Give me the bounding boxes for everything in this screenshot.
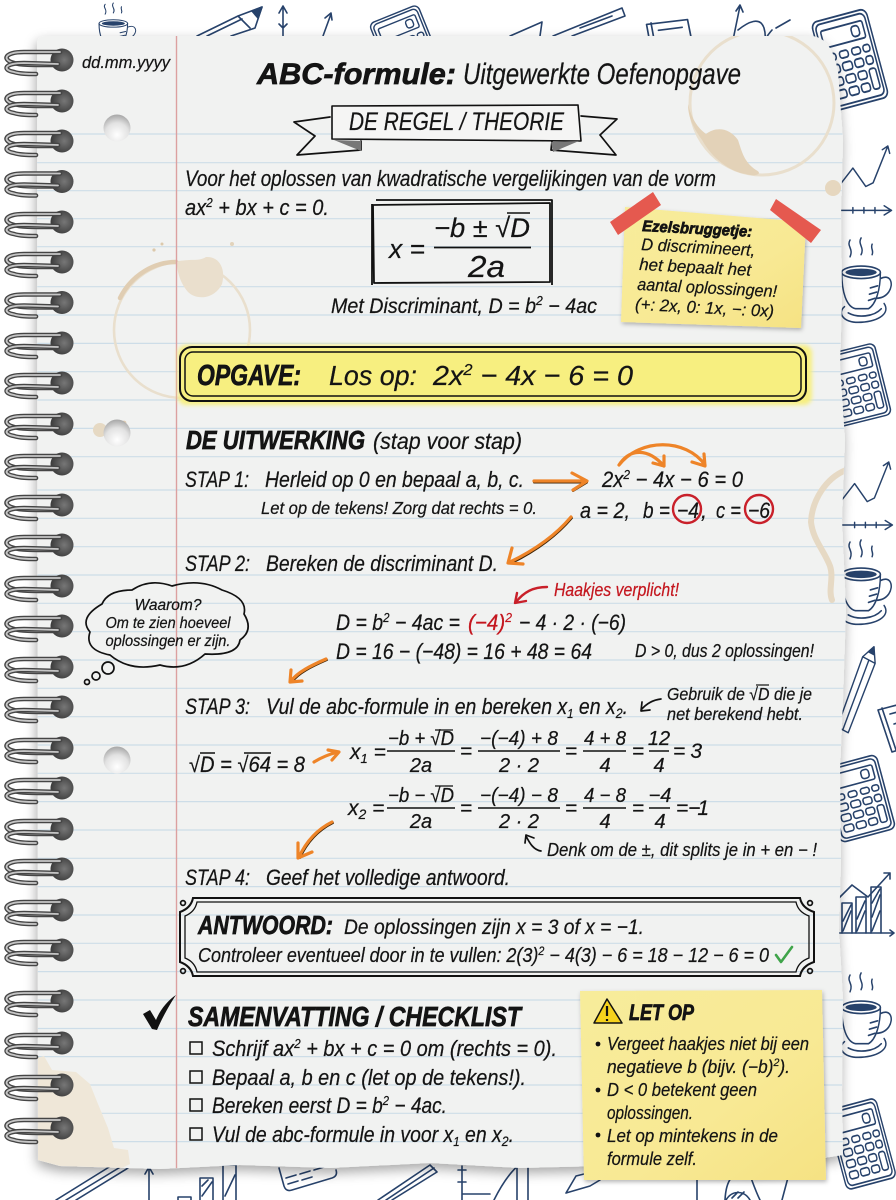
discriminant calculation: 2	[382, 610, 390, 625]
icon: arrow	[323, 13, 332, 36]
discriminant calculation: (−4)	[468, 610, 508, 635]
coefficients	[580, 495, 773, 523]
margin line	[176, 36, 178, 1170]
stap 1: Let op de tekens! Zorg dat rechts = 0.	[261, 498, 537, 518]
checklist: 2	[293, 1036, 301, 1051]
x2 formula: −(−4) − 8	[480, 785, 558, 807]
x1 formula: =	[565, 740, 577, 763]
icon: cup bottom	[697, 1170, 790, 1200]
x1 formula: 4	[653, 755, 665, 777]
x2 formula: =	[460, 797, 472, 820]
sticky note: let op: ).	[777, 1057, 790, 1077]
intro text: 2	[205, 195, 213, 210]
stap 4	[185, 865, 510, 890]
answer box: Controleer eventueel door in te vullen: 2(3)	[198, 945, 577, 967]
checklist: 2	[501, 1133, 509, 1149]
arrow: stap 1 to equation	[534, 473, 587, 491]
annotation: gebruik wortel D: net berekend hebt.	[667, 704, 803, 724]
sticky note: let op: Vergeet haakjes niet bij een	[607, 1034, 809, 1054]
checklist: en x	[460, 1122, 503, 1147]
discriminant calculation: D = 16 − (−48) = 16 + 48 = 64	[336, 639, 592, 664]
x1 formula: 12	[648, 728, 670, 750]
discriminant calculation: − 4 · 2 · (−6)	[519, 610, 626, 635]
sticky text	[635, 218, 781, 321]
checklist: Vul de abc-formule in voor x	[212, 1122, 486, 1147]
stap 3: .	[623, 694, 628, 719]
sticky note: let op	[580, 990, 826, 1180]
equation with sign arrows: 2x	[602, 467, 625, 492]
intro text: Voor het oplossen van kwadratische vergelijkingen van de vorm	[185, 166, 716, 191]
annotation: plus minus: Denk om de ±, dit splits je in + en − !	[547, 840, 817, 860]
banner: de regel / theorie	[294, 105, 617, 155]
sticky note: let op: negatieve b (bijv. (−b)	[607, 1057, 779, 1077]
equation with sign arrows: 2	[622, 467, 631, 482]
sticky text: (+: 2x, 0: 1x, −: 0x)	[635, 295, 775, 321]
stap 1: Herleid op 0 en bepaal a, b, c.	[265, 467, 524, 492]
root of D: √D = √64 = 8	[189, 752, 306, 777]
checkboxes	[190, 1042, 202, 1140]
icon: calculator bottom right	[826, 1098, 896, 1190]
discriminant calculation: D > 0, dus 2 oplossingen!	[635, 641, 814, 661]
intro text: + bx + c = 0.	[213, 195, 329, 220]
discriminant calculation: − 4ac =	[390, 610, 460, 635]
stap 2: Bereken de discriminant D.	[266, 551, 498, 576]
red annotation	[515, 579, 679, 603]
stap 3: STAP 3:	[185, 694, 250, 719]
x1 formula: 4	[599, 755, 611, 777]
coffee stain: left	[93, 242, 250, 437]
checklist: + bx + c = 0 om (rechts = 0).	[301, 1036, 557, 1061]
heading: de uitwerking: DE UITWERKING	[186, 425, 365, 455]
thought bubble: Om te zien hoeveel	[106, 615, 231, 632]
checklist: Schrijf ax	[212, 1036, 302, 1061]
icon: line chart right 2	[842, 462, 892, 530]
formula box: 2a	[467, 249, 505, 284]
sticky note: let op: Let op mintekens in de	[607, 1126, 778, 1146]
sticky note: let op: 2	[772, 1057, 779, 1069]
x2 formula: 4	[654, 811, 666, 833]
arrow: to stap 4	[298, 822, 333, 858]
checklist	[188, 1001, 557, 1149]
equation with sign arrows: − 4x − 6 = 0	[630, 467, 744, 492]
x2 formula: =	[565, 797, 577, 820]
icon: pencil bottom	[378, 1165, 437, 1200]
x1 formula: −(−4) + 8	[480, 728, 558, 750]
sticky text: Ezelsbruggetje:	[642, 218, 753, 241]
annotation: gebruik wortel D	[641, 684, 812, 724]
coefficients: ,	[701, 498, 707, 523]
opgave box: − 4x − 6 = 0	[472, 360, 633, 391]
x2 formula	[347, 785, 709, 833]
stap 1: STAP 1:	[185, 467, 249, 492]
thought bubble: oplossingen er zijn.	[106, 633, 230, 650]
icon: line chart right 1	[840, 146, 892, 215]
sticky note: let op: formule zelf.	[607, 1149, 697, 1169]
icon: pencil bottom left	[56, 1164, 128, 1200]
stap 2: STAP 2:	[185, 551, 250, 576]
checklist: − 4ac.	[389, 1093, 447, 1118]
x2 formula: x	[348, 797, 358, 820]
checklist: SAMENVATTING / CHECKLIST	[188, 1001, 523, 1032]
icon: calculator top middle	[369, 4, 444, 89]
title	[256, 58, 741, 91]
x2 formula: 2a	[409, 811, 432, 833]
icon: notepad	[640, 14, 702, 76]
opgave box: Los op:	[329, 360, 417, 391]
x2 formula: = −1	[676, 797, 709, 820]
red annotation: Haakjes verplicht!	[554, 579, 679, 600]
x2 formula: =	[366, 797, 384, 820]
thought bubble: Waarom?	[135, 597, 202, 614]
sticky note: ezelsbruggetje	[610, 192, 821, 328]
x1 formula: 2 · 2	[498, 755, 539, 777]
icon: notebook right	[878, 700, 896, 752]
discriminant calculation: 2	[504, 610, 513, 625]
x2 formula: =	[632, 797, 644, 820]
icon: coffee cup right 1	[841, 238, 891, 322]
x1 formula: x	[350, 741, 360, 764]
icon: bar chart right	[838, 873, 894, 936]
stap 4: STAP 4:	[185, 865, 250, 890]
ruled lines	[37, 134, 846, 1142]
x2 formula: −4	[649, 785, 671, 807]
coefficients: −4	[677, 498, 699, 523]
x1 formula	[349, 728, 702, 777]
formula box: x =	[387, 234, 425, 264]
x2 formula: 2	[358, 806, 366, 822]
icon: calculator right 1	[821, 343, 892, 427]
sticky text: aantal oplossingen!	[637, 275, 778, 301]
x1 formula: 4 + 8	[584, 728, 626, 750]
icon: arrow bottom	[145, 1167, 153, 1200]
coefficients: −6	[748, 498, 771, 523]
icon: calculator bottom	[279, 1167, 336, 1190]
formula box: −b ± √D	[434, 213, 530, 243]
coffee stain: bottom left	[37, 1056, 130, 1170]
checklist: Bereken eerst D = b	[212, 1093, 408, 1118]
answer box: − 4(3) − 6 = 18 − 12 − 6 = 0	[544, 945, 769, 967]
checklist: .	[509, 1122, 514, 1147]
intro text: ax	[185, 195, 208, 220]
x1 formula: =	[632, 740, 644, 763]
date: dd.mm.yyyy	[82, 53, 171, 72]
stap 1	[185, 467, 537, 518]
equation with sign arrows	[601, 445, 744, 492]
icon: calculator right 2	[821, 754, 896, 843]
opgave box: OPGAVE:	[197, 360, 301, 392]
answer box	[180, 898, 814, 976]
formula box	[372, 200, 552, 285]
opgave box: 2	[462, 362, 473, 379]
icon: pencil right	[828, 644, 890, 733]
icon: coffee cup top	[99, 3, 136, 53]
answer box: ANTWOORD:	[197, 910, 333, 940]
heading: de uitwerking: (stap voor stap)	[373, 428, 522, 454]
checklist: Bepaal a, b en c (let op de tekens!).	[212, 1065, 526, 1090]
x1 formula: −b + √D	[388, 728, 454, 750]
arrow: to stap 2	[508, 517, 572, 564]
thought bubble	[84, 583, 248, 684]
discriminant text: 2	[535, 293, 544, 308]
checklist: 2	[382, 1093, 390, 1108]
x2 formula: 4 − 8	[584, 785, 626, 807]
arrow: root to x1	[314, 750, 339, 762]
icon: pencil top right	[510, 8, 625, 36]
x1 formula: =	[460, 740, 472, 763]
sticky note: let op: LET OP	[629, 1000, 694, 1025]
arrow: to stap 3	[290, 659, 327, 682]
coefficients: c =	[716, 498, 741, 523]
icon: double arrow	[279, 6, 287, 36]
green check	[776, 947, 792, 962]
stap 2	[185, 551, 498, 576]
x2 formula: 4	[599, 811, 611, 833]
stap 3: en x	[574, 694, 617, 719]
stap 3: 2	[615, 705, 623, 721]
discriminant calculation	[336, 610, 814, 664]
icon: graph bottom	[458, 1164, 528, 1200]
x2 formula: −b − √D	[388, 785, 454, 807]
discriminant text: Met Discriminant, D = b	[331, 295, 550, 318]
coefficients: a = 2,	[580, 498, 630, 523]
sticky text: het bepaalt het	[639, 255, 753, 280]
icon: graph top	[733, 5, 790, 40]
annotation: plus minus	[525, 835, 817, 860]
discriminant calculation: D = b	[336, 610, 389, 635]
opgave box: 2x	[433, 360, 463, 391]
checklist: 1	[453, 1134, 460, 1149]
icon: coffee cup right 3	[841, 973, 891, 1057]
annotation: gebruik wortel D: Gebruik de √D die je	[667, 684, 812, 704]
x1 formula: =	[368, 741, 386, 764]
icon: bar chart bottom	[178, 1165, 236, 1200]
discriminant text: − 4ac	[543, 295, 597, 318]
x2 formula: 2 · 2	[498, 811, 539, 833]
icon: pencil tip bottom	[566, 1170, 600, 1193]
sticky note: let op: oplossingen.	[607, 1103, 693, 1123]
tape	[610, 192, 821, 243]
red circles	[673, 495, 701, 523]
icon: coffee cup right 2	[841, 540, 891, 624]
intro text	[185, 166, 716, 220]
spiral binding	[7, 48, 74, 1142]
icon: pencil top left	[197, 7, 262, 36]
answer box: 2	[537, 944, 545, 958]
coffee stain: right	[811, 470, 846, 600]
stap 3: Vul de abc-formule in en bereken x	[266, 694, 607, 719]
title: Uitgewerkte Oefenopgave	[463, 58, 741, 91]
icon: calculator top right	[811, 8, 889, 111]
x1 formula: 1	[360, 751, 368, 766]
heading: de uitwerking	[186, 425, 522, 455]
sticky text: D discrimineert,	[641, 235, 756, 260]
icon: bars bottom	[726, 1192, 750, 1200]
curved arrows	[619, 445, 705, 466]
sticky note: let op: D < 0 betekent geen	[607, 1080, 757, 1100]
x1 formula: 2a	[409, 755, 432, 777]
title: ABC-formule:	[256, 58, 456, 91]
coffee stain: top right	[688, 31, 841, 196]
x1 formula: = 3	[673, 740, 702, 763]
icon: warning triangle	[594, 999, 622, 1023]
coefficients: b =	[643, 498, 670, 523]
big check mark	[143, 995, 176, 1030]
opgave box	[178, 345, 812, 405]
stap 4: Geef het volledige antwoord.	[266, 865, 510, 890]
punch holes	[104, 114, 130, 774]
answer box: De oplossingen zijn x = 3 of x = −1.	[344, 916, 644, 939]
banner: de regel / theorie: DE REGEL / THEORIE	[349, 108, 564, 136]
stap 3: 1	[567, 706, 574, 721]
